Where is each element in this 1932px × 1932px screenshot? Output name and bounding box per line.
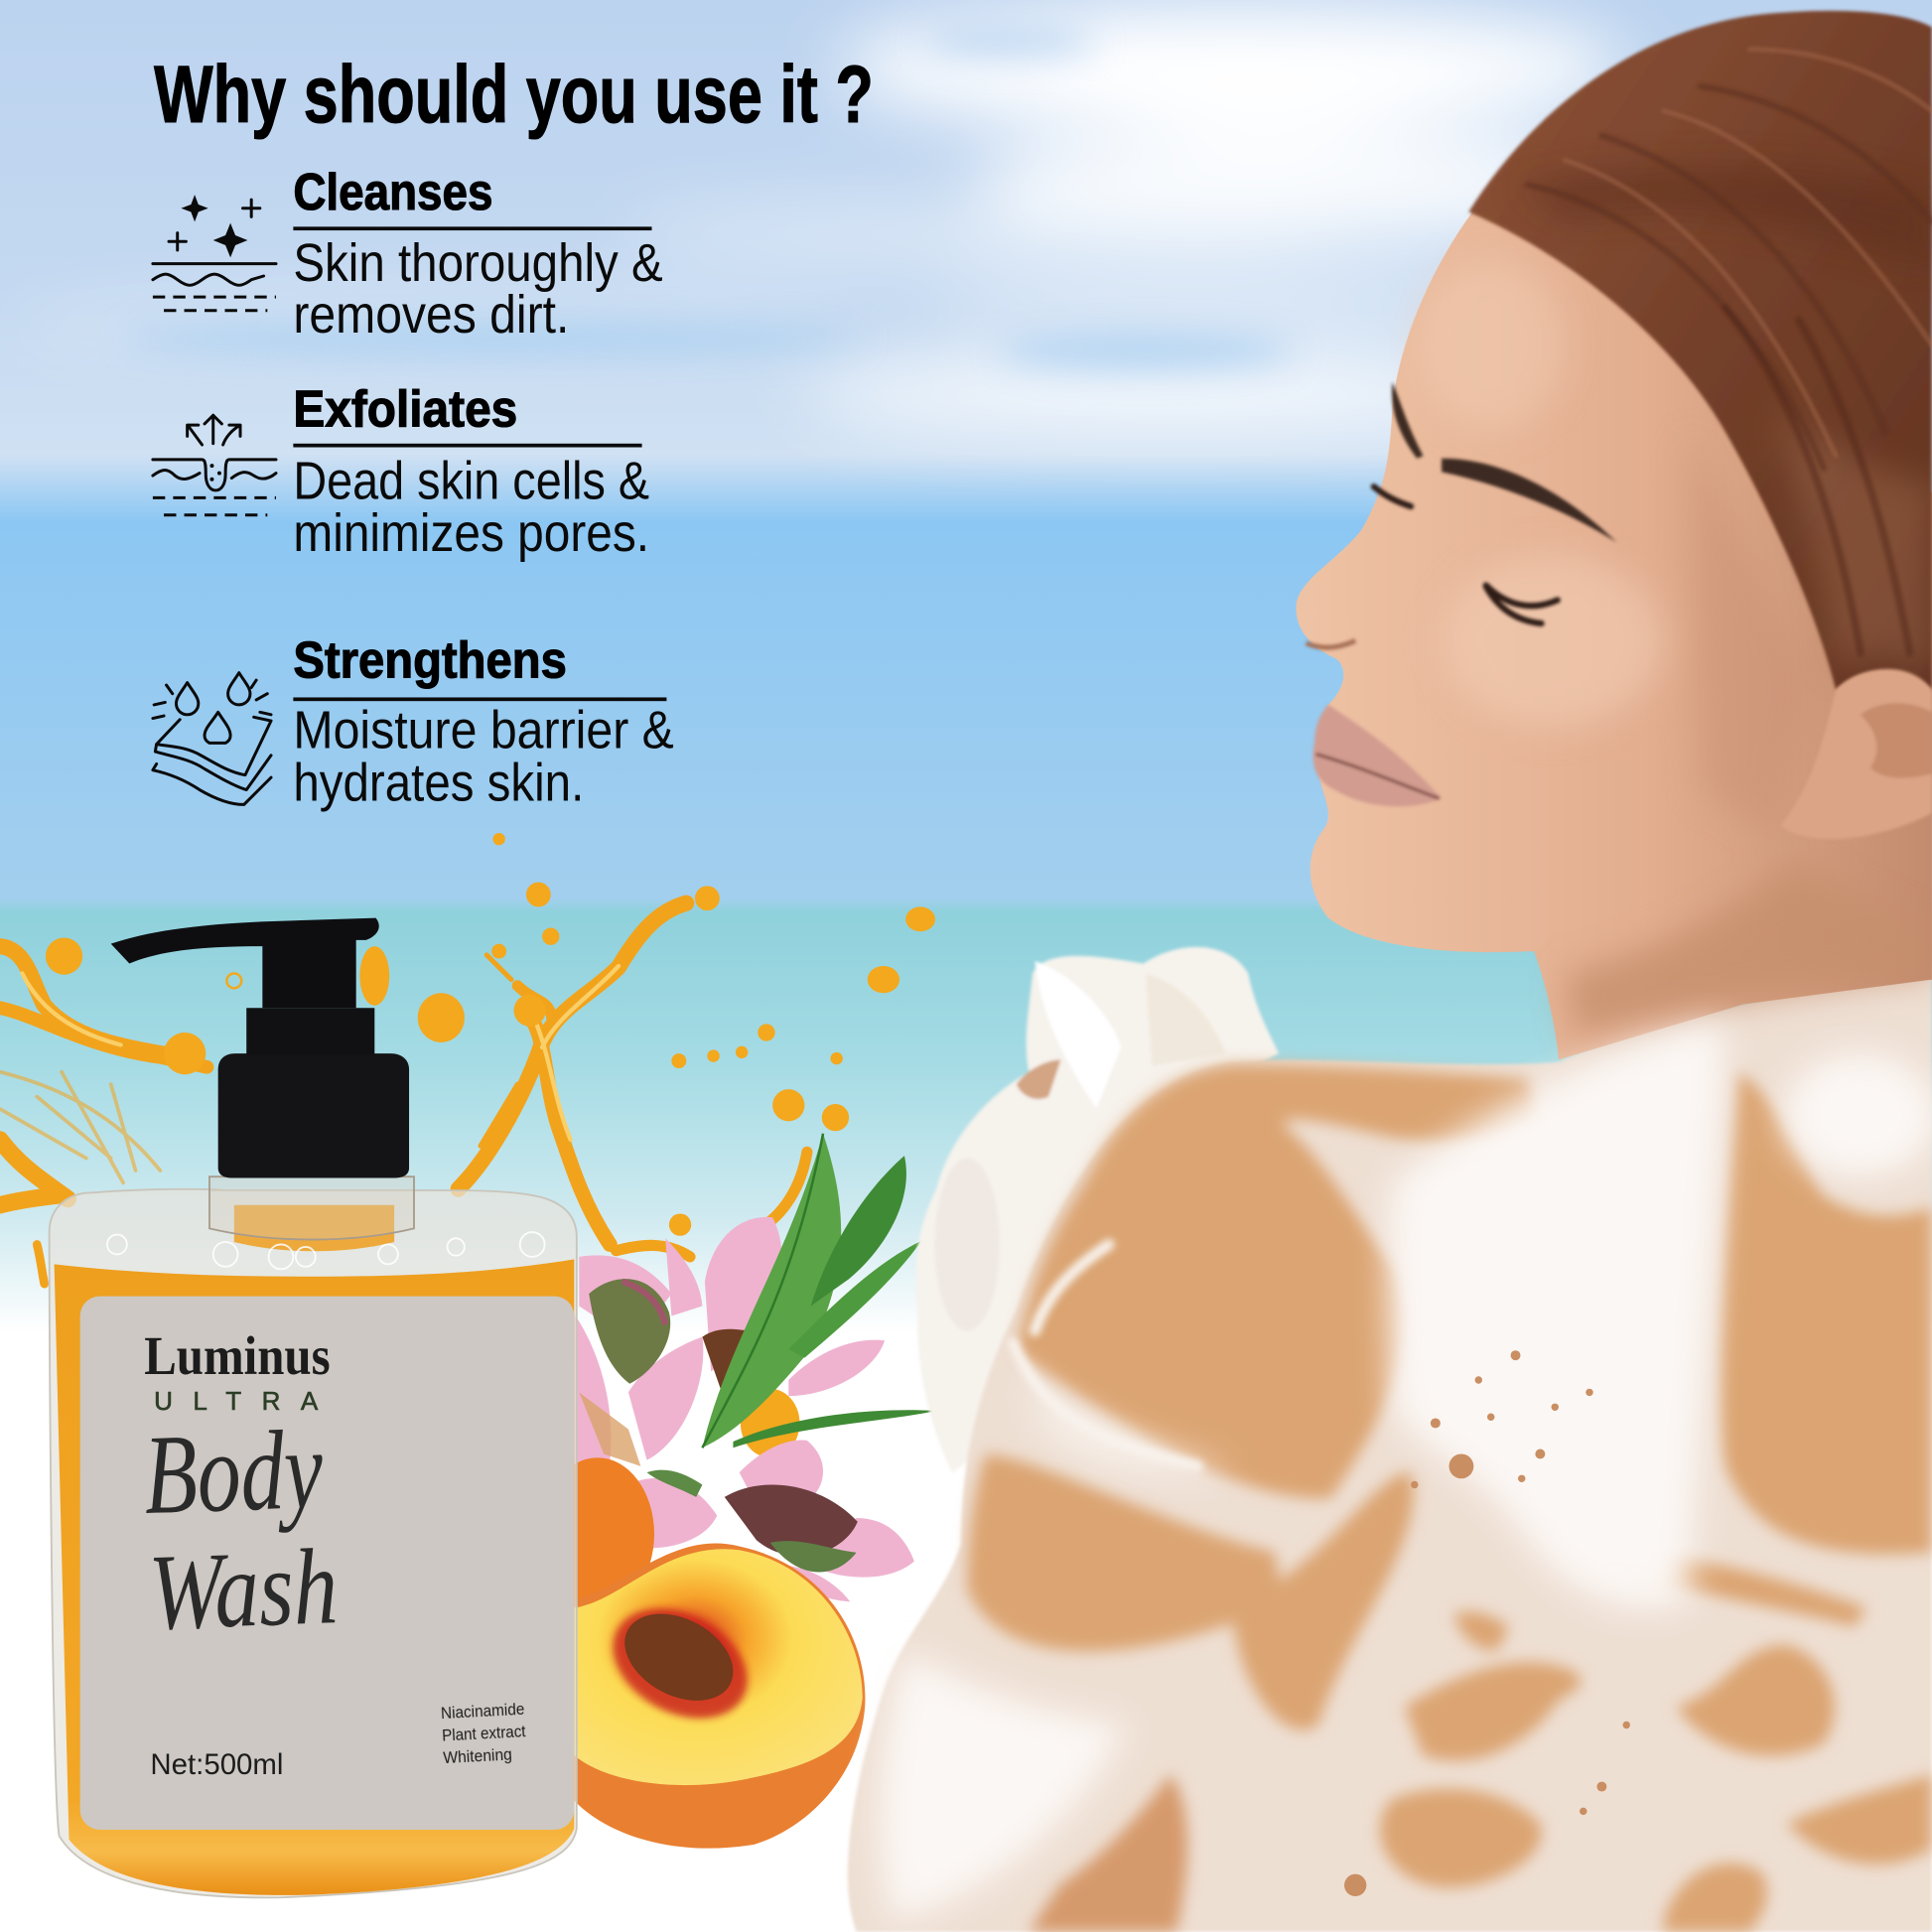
text: cleanses description: Skin thoroughly &	[293, 234, 663, 293]
closed eye	[1374, 486, 1558, 623]
blossom petals	[573, 1217, 914, 1601]
heading: Exfoliates: Exfoliates	[293, 380, 517, 438]
whole peach	[541, 1457, 654, 1610]
orange liquid splash	[0, 833, 935, 1457]
icon: water drops on skin layers	[153, 673, 271, 804]
net volume: Net:500ml	[150, 1748, 283, 1781]
ingredients: Niacinamide	[441, 1700, 525, 1723]
ingredients: Plant extract	[442, 1722, 526, 1745]
foam highlights	[880, 1023, 1932, 1922]
text: strengthens description: hydrates skin.	[293, 755, 584, 813]
neck and face	[1296, 211, 1932, 1059]
pump nozzle	[111, 918, 379, 1008]
liquid in glass neck	[234, 1205, 394, 1251]
product name: Wash	[147, 1526, 340, 1653]
peach stone	[610, 1596, 748, 1719]
face highlights and shadows	[1417, 259, 1932, 1035]
peach half	[554, 1544, 865, 1849]
benefit: cleanses	[153, 164, 663, 345]
eyebrow	[1392, 382, 1616, 542]
text: strengthens description	[293, 701, 674, 813]
foam streaks on arm	[1013, 1244, 1197, 1466]
title: Why should you use it ?	[154, 50, 874, 140]
blossom stamens	[579, 1392, 640, 1466]
icon: clean skin with sparkles	[153, 195, 276, 311]
back and arm	[848, 964, 1932, 1932]
rim bubbles	[107, 1232, 545, 1269]
ingredients: Whitening	[443, 1744, 512, 1767]
tan skin patches through the foam	[967, 1064, 1932, 1932]
peach and blossom	[541, 1134, 936, 1849]
text: exfoliates description: minimizes pores.	[293, 504, 649, 563]
text: exfoliates description: Dead skin cells &	[293, 453, 649, 511]
product name: Body	[142, 1406, 325, 1538]
sub brand: ULTRA	[154, 1386, 319, 1416]
text: cleanses description: removes dirt.	[293, 286, 569, 345]
heading: Cleanses: Cleanses	[293, 164, 492, 221]
blossom buds	[589, 1279, 858, 1572]
heading: Strengthens: Strengthens	[293, 632, 567, 690]
foam bubbles	[1344, 1350, 1630, 1896]
liquid	[55, 1259, 574, 1895]
product: body wash bottle	[50, 918, 577, 1897]
nostril	[1307, 640, 1355, 647]
benefit: strengthens	[153, 632, 674, 813]
foam puff	[915, 947, 1279, 1472]
text: exfoliates description	[293, 453, 649, 563]
pump cap	[218, 1053, 409, 1177]
icon: pore with arrows	[153, 415, 276, 515]
leaves	[702, 1134, 936, 1448]
ear	[1780, 669, 1932, 839]
woman with foam on shoulder	[848, 11, 1932, 1932]
hair	[1468, 11, 1932, 690]
text: strengthens description: Moisture barrier &	[293, 701, 674, 759]
brand name: Luminus	[144, 1325, 331, 1386]
bottle shell	[50, 1189, 577, 1897]
product name	[142, 1406, 340, 1653]
lips	[1312, 705, 1442, 806]
pump collar	[246, 1008, 374, 1054]
ingredients	[441, 1700, 527, 1767]
text: cleanses description	[293, 234, 663, 345]
glass neck	[209, 1176, 414, 1240]
label	[80, 1297, 574, 1830]
benefit: exfoliates	[153, 380, 649, 563]
